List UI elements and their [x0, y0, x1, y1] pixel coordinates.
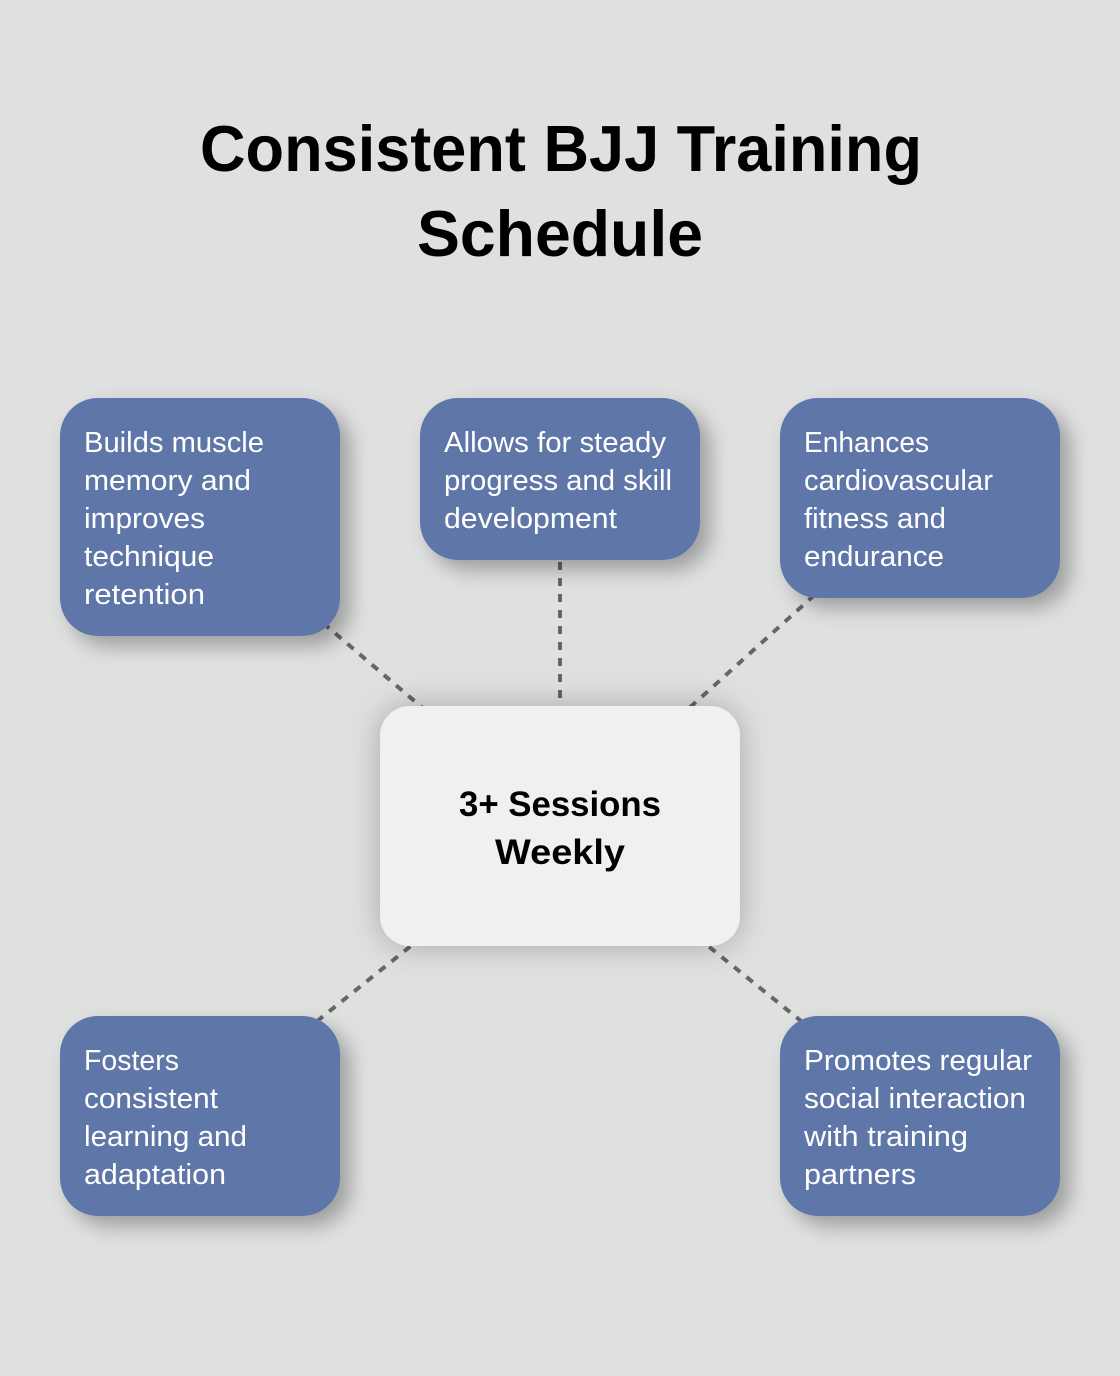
panel: consistent learning: consistent	[84, 1083, 218, 1115]
title	[200, 112, 922, 270]
panel: consistent learning: learning and	[84, 1121, 247, 1153]
panel: centre sessions: 3+ Sessions	[459, 785, 661, 824]
panel: cardiovascular fitness: cardiovascular	[804, 465, 994, 497]
panel: muscle memory	[60, 398, 340, 636]
panel: muscle memory: memory and	[84, 465, 251, 497]
panel: social interaction: with training	[803, 1121, 968, 1153]
panel: muscle memory: Builds muscle	[84, 427, 264, 459]
panel: steady progress: progress and skill	[444, 465, 672, 497]
panel: steady progress: development	[444, 503, 617, 535]
title: Consistent BJJ Training	[200, 112, 922, 185]
panel: social interaction: Promotes regular	[804, 1045, 1033, 1077]
panel: consistent learning	[60, 1016, 340, 1216]
panel: steady progress	[420, 398, 700, 560]
connector: top left	[323, 623, 425, 710]
connector: top centre	[558, 562, 562, 698]
connector: bottom right	[697, 937, 806, 1025]
panel: cardiovascular fitness: fitness and	[804, 503, 946, 535]
panel: consistent learning: Fosters	[84, 1045, 179, 1077]
panel: cardiovascular fitness: Enhances	[804, 427, 929, 459]
panel: social interaction	[780, 1016, 1060, 1216]
panel: consistent learning: adaptation	[84, 1159, 226, 1191]
panel: social interaction: social interaction	[804, 1083, 1026, 1115]
panel: centre sessions	[380, 706, 740, 946]
connector: top right	[690, 594, 815, 708]
panel: muscle memory: technique	[84, 541, 214, 573]
connector: bottom left	[317, 945, 412, 1022]
panel: social interaction: partners	[804, 1159, 916, 1191]
panel: steady progress: Allows for steady	[444, 427, 667, 459]
panel: centre sessions: Weekly	[495, 833, 626, 872]
panel: cardiovascular fitness: endurance	[804, 541, 944, 573]
panel: muscle memory: improves	[84, 503, 205, 535]
panel: cardiovascular fitness	[780, 398, 1060, 598]
panel: muscle memory: retention	[84, 579, 205, 611]
title: Schedule	[417, 197, 703, 270]
